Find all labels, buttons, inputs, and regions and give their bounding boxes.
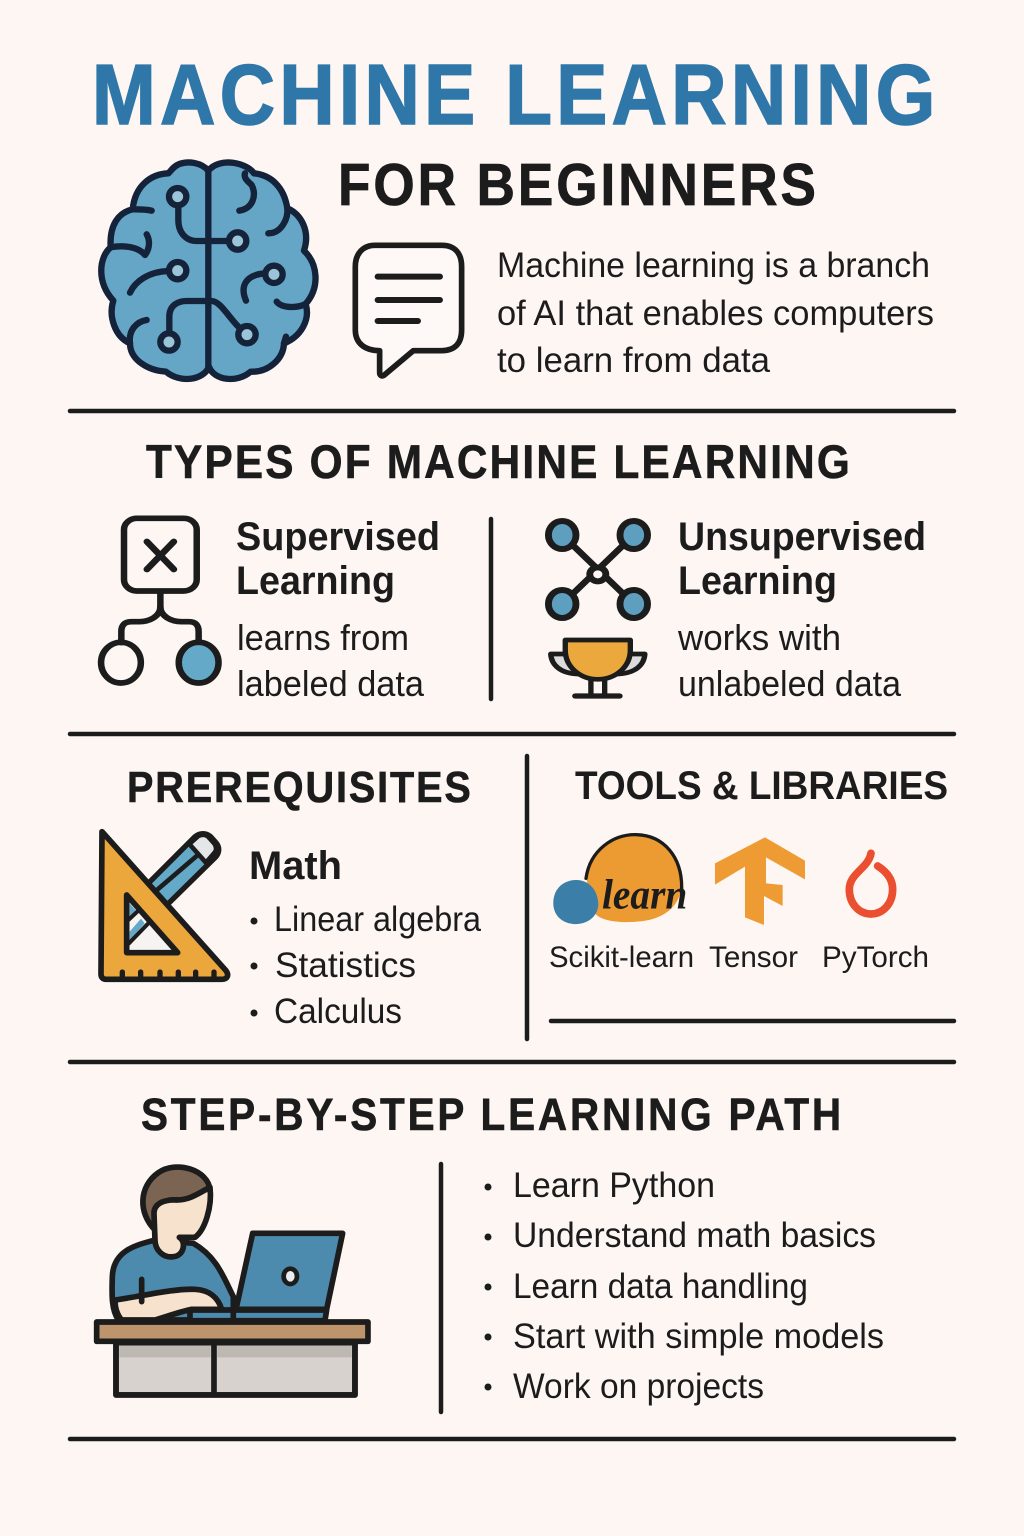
math list: Linear algebra [274,900,481,939]
tool labels: PyTorch [822,941,929,974]
icon: network [548,521,648,618]
title: MACHINE LEARNING [92,48,935,143]
icon: scikit-learn logo: learn [602,871,687,918]
learning path list: Learn data handling [513,1267,808,1306]
unsupervised learning text: Learning [678,559,837,603]
icon: person at laptop [97,1167,368,1395]
learning path list: Start with simple models [513,1317,884,1356]
icon: pytorch logo [849,853,893,914]
icon: speech bubble [355,245,462,376]
tool labels: Scikit-learn [549,941,694,974]
learning path list: Learn Python [513,1166,715,1205]
heading: types of machine learning: TYPES OF MACHINE LEARNING [146,437,850,489]
supervised learning text: Supervised [236,515,440,559]
tool labels [549,941,929,974]
subtitle: FOR BEGINNERS [338,151,816,218]
intro text: to learn from data [497,341,771,380]
icon: scikit-learn logo [553,835,687,924]
intro text: of AI that enables computers [497,294,934,333]
icon: trophy [551,640,645,696]
supervised learning text: Learning [236,559,395,603]
unsupervised learning text [677,515,926,704]
icon: supervised tree [101,518,219,683]
heading: tools and libraries: TOOLS & LIBRARIES [575,764,948,808]
math list [249,844,481,1031]
icon: brain [101,162,316,379]
icon: tensorflow logo [715,837,805,925]
tool labels: Tensor [709,941,798,974]
math list: Calculus [274,992,402,1031]
unsupervised learning text: unlabeled data [678,663,902,704]
math list: Statistics [275,946,416,985]
intro text: Machine learning is a branch [497,246,930,285]
supervised learning text: labeled data [237,663,425,704]
heading: step-by-step learning path: STEP-BY-STEP LEARNING PATH [141,1090,841,1141]
supervised learning text [236,515,440,704]
math list: Math [249,844,342,888]
learning path list: Work on projects [513,1367,764,1406]
learning path list: Understand math basics [513,1216,876,1255]
supervised learning text: learns from [237,617,409,658]
icon: set square and pencil [101,832,228,979]
heading: prerequisites: PREREQUISITES [127,762,471,811]
unsupervised learning text: works with [677,617,841,658]
unsupervised learning text: Unsupervised [678,515,926,559]
learning path list [484,1166,884,1406]
intro text [497,246,934,380]
